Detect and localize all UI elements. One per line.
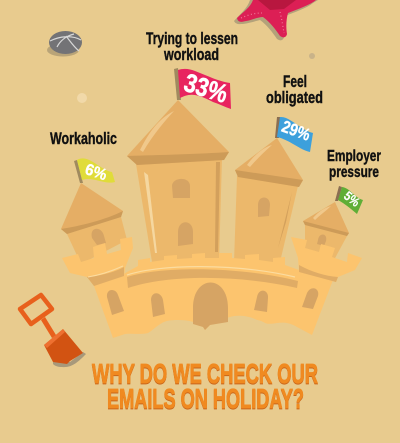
title [92, 358, 318, 415]
label: Employer pressure: Employer [327, 148, 381, 165]
left tower [61, 183, 127, 264]
flag: 6%: 6% [83, 161, 109, 184]
small right tower [303, 202, 349, 260]
door and windows [107, 290, 124, 315]
label: Feel obligated: obligated [266, 88, 323, 107]
right battlement [291, 237, 362, 282]
label: Employer pressure: pressure [329, 164, 379, 181]
flag: 5%: 5% [341, 188, 363, 210]
label: Employer pressure [327, 148, 381, 181]
label: Trying to lessen workload: Trying to lessen [146, 29, 238, 48]
label: Trying to lessen workload: workload [163, 45, 219, 64]
centre tower [127, 100, 229, 268]
icon: red starfish [234, 0, 318, 40]
label: Trying to lessen workload [146, 29, 238, 64]
castle: back towers [61, 100, 349, 268]
left battlement [62, 237, 133, 286]
label: Workaholic: Workaholic [50, 129, 117, 148]
castle: front wall [62, 237, 362, 338]
label: Feel obligated [266, 72, 323, 107]
flag: 33%: 33% [181, 67, 231, 109]
right tower [234, 138, 303, 262]
wall body [94, 253, 336, 338]
icon: orange shovel [20, 295, 86, 367]
label: Feel obligated: Feel [283, 72, 307, 91]
icon: striped pebble [47, 31, 82, 56]
flag: 5% [335, 186, 363, 214]
wall band [127, 271, 298, 291]
flag: 6% [74, 158, 115, 184]
flag: 29% [275, 117, 313, 152]
flag: 29%: 29% [279, 117, 313, 145]
